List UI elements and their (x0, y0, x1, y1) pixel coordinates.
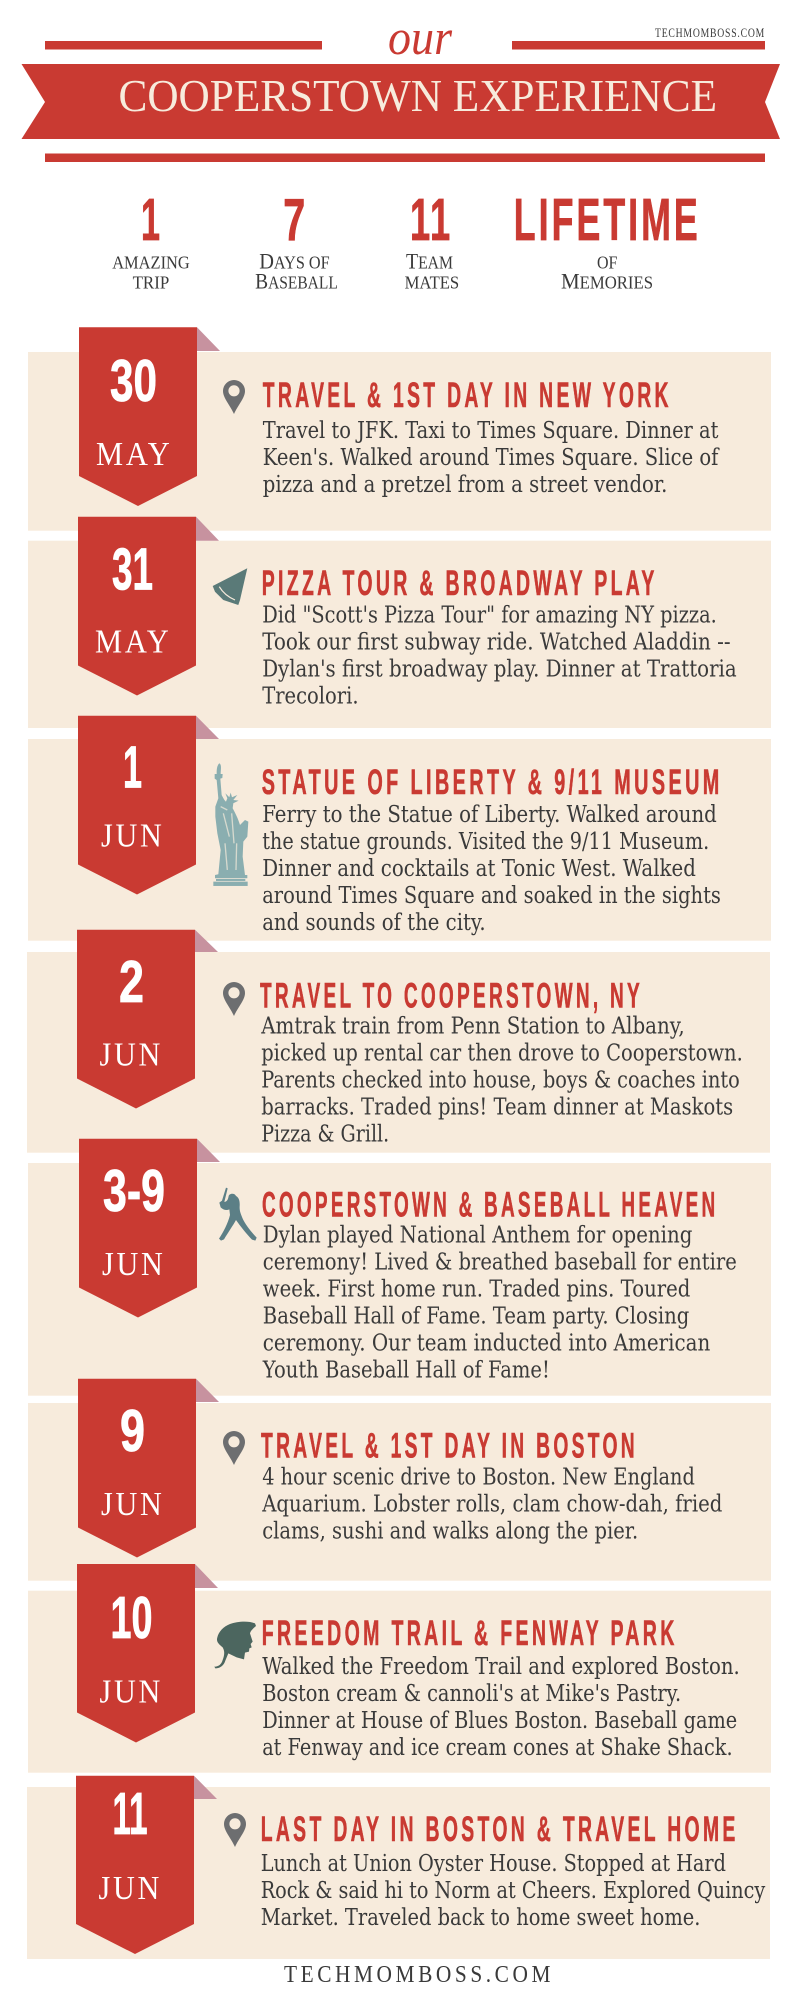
stat: 11 team mates (405, 186, 459, 292)
date ribbon (79, 1139, 220, 1318)
icon: pizza slice (213, 568, 247, 605)
body text (261, 1464, 723, 1545)
date ribbon: JUN (101, 818, 164, 855)
stat: lifetime of memories: OF (597, 252, 618, 272)
date ribbon: 30 (110, 347, 157, 414)
body text: week. First home run. Traded pins. Toured (263, 1277, 691, 1303)
body text: pizza and a pretzel from a street vendor. (263, 472, 667, 498)
panel background (27, 1787, 770, 1959)
body text: around Times Square and soaked in the sights (262, 883, 721, 909)
panel background (27, 952, 770, 1153)
body text: Amtrak train from Penn Station to Albany, (260, 1014, 685, 1040)
panel: 11 June (27, 1776, 770, 1959)
stat: 11 team mates: MATES (405, 272, 459, 292)
date ribbon (77, 930, 218, 1108)
body text: Dylan's first broadway play. Dinner at Trattoria (262, 657, 737, 683)
body text: Ferry to the Statue of Liberty. Walked around (262, 802, 717, 828)
icon: map pin (223, 982, 245, 1016)
stat: lifetime of memories (514, 186, 701, 293)
body text: the statue grounds. Visited the 9/11 Museum. (262, 829, 709, 855)
date ribbon (78, 1379, 219, 1558)
icon: statue of liberty (213, 763, 248, 886)
date ribbon: JUN (102, 1246, 166, 1283)
body text (260, 1014, 743, 1148)
stat: 1 amazing trip: TRIP (133, 272, 170, 292)
body text: Dinner and cocktails at Tonic West. Walked (262, 856, 696, 882)
body text (263, 418, 720, 498)
panel: 9 June (28, 1379, 771, 1581)
body text (262, 802, 721, 936)
icon: baseball batter (219, 1188, 257, 1241)
date ribbon (76, 1776, 217, 1954)
panel: 3-9 June (28, 1139, 771, 1396)
date ribbon (79, 327, 220, 506)
stat: 7 days of baseball: DAYS OF (259, 248, 330, 273)
body text (262, 1654, 740, 1761)
date ribbon: JUN (98, 1870, 162, 1907)
panel background (28, 541, 771, 728)
stat: 7 days of baseball: 7 (283, 186, 305, 253)
body text: Trecolori. (262, 684, 359, 710)
script word: our: our (388, 9, 452, 65)
body text: Travel to JFK. Taxi to Times Square. Dinner at (263, 418, 719, 444)
body text (261, 1851, 765, 1931)
date ribbon: 31 (112, 535, 153, 602)
body text: Pizza & Grill. (261, 1122, 389, 1148)
body text: clams, sushi and walks along the pier. (262, 1519, 638, 1545)
stats row (112, 186, 701, 293)
stat: 7 days of baseball (255, 186, 338, 293)
date ribbon: JUN (101, 1486, 164, 1523)
date ribbon: JUN (100, 1674, 163, 1711)
body text: Boston cream & cannoli's at Mike's Pastry. (262, 1681, 681, 1707)
date ribbon: MAY (95, 624, 172, 661)
stat: lifetime of memories: MEMORIES (561, 268, 653, 293)
date ribbon: JUN (100, 1037, 163, 1074)
panel background (28, 1591, 771, 1773)
date ribbon (78, 517, 219, 696)
date ribbon: 10 (110, 1584, 152, 1651)
icon: map pin (223, 380, 245, 414)
top rule right (512, 41, 765, 50)
icon: map pin (223, 1431, 245, 1465)
stat: 11 team mates: 11 (410, 186, 452, 253)
stat: 11 team mates: TEAM (406, 248, 453, 273)
body text: Lunch at Union Oyster House. Stopped at Hard (261, 1851, 726, 1877)
icon: colonial minuteman head (214, 1622, 256, 1668)
body text: Market. Traveled back to home sweet home. (261, 1905, 700, 1931)
title: COOPERSTOWN EXPERIENCE (118, 70, 717, 121)
title banner ribbon (22, 64, 780, 139)
panel: 2 June (27, 930, 770, 1153)
date ribbon: MAY (96, 436, 172, 473)
body text: Keen's. Walked around Times Square. Slice of (263, 445, 720, 471)
body text (262, 603, 737, 710)
header (22, 9, 780, 162)
body text: Aquarium. Lobster rolls, clam chow-dah, fried (261, 1492, 723, 1518)
panel: 30 May (28, 327, 771, 531)
date ribbon: 3-9 (103, 1157, 165, 1224)
stat: 1 amazing trip: 1 (141, 186, 160, 253)
body text: and sounds of the city. (262, 910, 486, 936)
body text: ceremony. Our team inducted into American (263, 1331, 710, 1357)
site credit top right: TECHMOMBOSS.COM (655, 26, 765, 40)
panel: 1 June (28, 716, 771, 941)
panel: 31 May (28, 517, 771, 728)
body text: Baseball Hall of Fame. Team party. Closing (263, 1304, 690, 1330)
top rule left (45, 41, 322, 50)
panel background (28, 352, 771, 531)
panel background (28, 739, 771, 941)
body text: Took our first subway ride. Watched Aladdin -- (262, 630, 731, 656)
date ribbon (78, 716, 219, 894)
footer site credit: TECHMOMBOSS.COM (284, 1962, 554, 1988)
body text: Youth Baseball Hall of Fame! (262, 1358, 550, 1384)
panel background (28, 1163, 771, 1396)
panel: 10 June (28, 1564, 771, 1773)
panel background (28, 1403, 771, 1581)
stat: 7 days of baseball: BASEBALL (255, 268, 338, 293)
stat: 1 amazing trip (112, 186, 190, 292)
date ribbon: 1 (123, 734, 142, 801)
stat: 1 amazing trip: AMAZING (112, 252, 190, 272)
date ribbon: 2 (119, 948, 144, 1015)
bottom rule (45, 154, 765, 162)
date ribbon: 11 (112, 1780, 148, 1847)
date ribbon (77, 1564, 218, 1742)
body text: barracks. Traded pins! Team dinner at Maskots (261, 1095, 733, 1121)
body text: Dylan played National Anthem for opening (263, 1223, 693, 1249)
date ribbon: 9 (120, 1397, 145, 1464)
body text: Did "Scott's Pizza Tour" for amazing NY pizza. (262, 603, 717, 629)
body text (262, 1223, 737, 1384)
icon: map pin (224, 1813, 246, 1847)
body text: 4 hour scenic drive to Boston. New England (262, 1464, 695, 1490)
